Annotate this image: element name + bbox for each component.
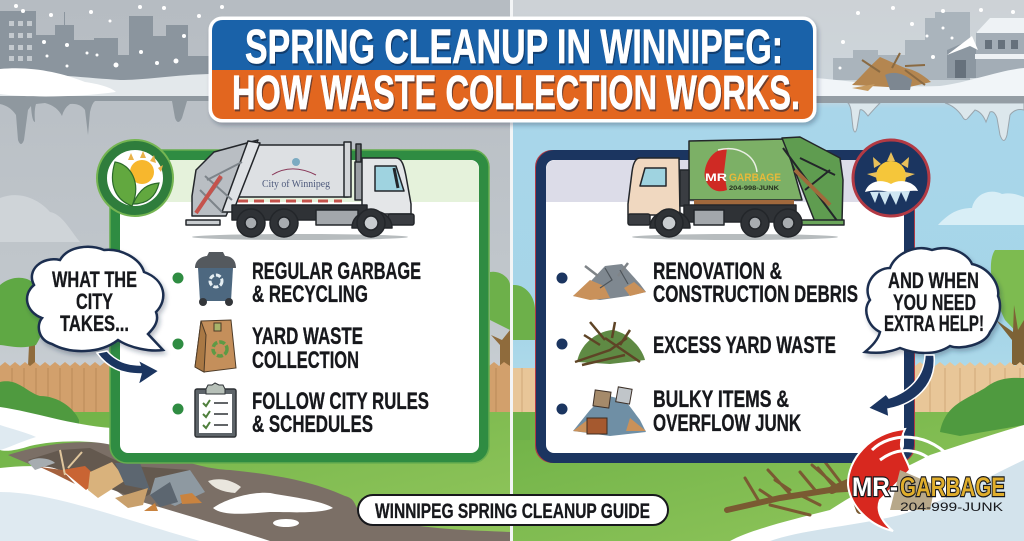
- skyline right: [833, 12, 970, 80]
- fence right: [513, 362, 1024, 414]
- grass left: [0, 412, 510, 541]
- arrow: to city list: [97, 351, 159, 385]
- list item: city rules: FOLLOW CITY RULES: [252, 388, 429, 415]
- badge: sun and snow: [853, 140, 929, 216]
- truck logo text: City of Winnipeg: [262, 178, 330, 190]
- callout: what the city takes: WHAT THE: [52, 267, 137, 292]
- list item: regular garbage: & RECYCLING: [252, 281, 368, 308]
- callout: what the city takes: TAKES...: [60, 311, 129, 336]
- icon: paper bag: [195, 320, 236, 372]
- snow bank right: [730, 425, 1024, 541]
- bush left: [0, 381, 79, 432]
- list item: bulky items: [556, 386, 801, 437]
- list item: bulky items: BULKY ITEMS &: [653, 386, 789, 413]
- callout: what the city takes: [27, 247, 163, 351]
- list item: regular garbage: REGULAR GARBAGE: [252, 258, 421, 285]
- list item: excess yard waste: EXCESS YARD WASTE: [653, 332, 836, 359]
- logo wordmark: MR-: [852, 472, 898, 502]
- panel top tint: [120, 160, 479, 202]
- list item: bulky items: OVERFLOW JUNK: [653, 410, 801, 437]
- snowflakes left: [14, 4, 224, 68]
- icon: branch pile: [575, 322, 645, 365]
- list item: renovation debris: RENOVATION &: [653, 258, 782, 285]
- snow bank left: [0, 407, 333, 541]
- truck logo text: [705, 172, 781, 192]
- list item: regular garbage: [172, 252, 421, 308]
- list item: excess yard waste: [556, 322, 836, 365]
- callout: when you need extra help: YOU NEED: [893, 290, 976, 315]
- truck logo text: 204-998-JUNK: [729, 186, 780, 192]
- footer label: WINNIPEG SPRING CLEANUP GUIDE: [375, 500, 650, 523]
- fallen branches: [727, 462, 862, 515]
- panel top tint: [546, 160, 904, 202]
- panel: when you need extra help: [537, 137, 929, 461]
- skyline left: [0, 11, 210, 80]
- footer label: [358, 495, 668, 525]
- panel: spring background right: [513, 0, 1024, 541]
- arrow: to junk list: [868, 355, 934, 417]
- truck logo text: GARBAGE: [729, 172, 781, 184]
- icon: clipboard: [195, 383, 236, 437]
- callout: when you need extra help: [865, 248, 1000, 353]
- debris pile left: [28, 448, 241, 511]
- list item: yard waste: [172, 320, 363, 374]
- debris pile on ledge: [852, 53, 931, 91]
- list item: city rules: [172, 383, 429, 438]
- panel: winter background left: [0, 0, 510, 541]
- grass right: [513, 412, 1024, 541]
- truck logo text: MR: [705, 172, 727, 184]
- list item: renovation debris: [556, 258, 858, 308]
- icon: wheelie bin: [195, 252, 236, 306]
- callout: what the city takes: CITY: [76, 289, 113, 314]
- house right: [947, 18, 1024, 78]
- panel: what the city takes: [97, 140, 489, 463]
- icon: debris pile: [573, 263, 646, 300]
- icon: junk pile: [573, 387, 646, 436]
- fence left: [0, 362, 510, 414]
- snowflakes right: [838, 6, 1015, 70]
- truck: mr garbage: [628, 137, 844, 240]
- list item: renovation debris: CONSTRUCTION DEBRIS: [653, 281, 858, 308]
- tree right: [513, 250, 1024, 365]
- logo: mr garbage: [848, 429, 1005, 531]
- mud patch: [8, 442, 510, 541]
- divider: [510, 0, 513, 541]
- list item: yard waste: COLLECTION: [252, 347, 359, 374]
- snow ledge right: [816, 68, 1024, 98]
- callout: when you need extra help: AND WHEN: [888, 268, 979, 293]
- snow ledge left: [0, 72, 215, 97]
- tree left: [0, 272, 510, 368]
- truck: city of winnipeg: [186, 140, 414, 240]
- logo: mr garbage: 204-999-JUNK: [900, 500, 1003, 514]
- icicles left: [0, 96, 210, 144]
- list item: city rules: & SCHEDULES: [252, 411, 373, 438]
- list item: yard waste: YARD WASTE: [252, 323, 363, 350]
- cloud left: [0, 195, 80, 242]
- bush right: [940, 378, 1024, 436]
- title banner: [209, 17, 816, 122]
- icicles right: [848, 103, 1024, 140]
- badge: leaf and sun: [97, 140, 173, 216]
- cloud right: [938, 192, 1024, 225]
- title line 1: SPRING CLEANUP IN WINNIPEG:: [245, 21, 783, 74]
